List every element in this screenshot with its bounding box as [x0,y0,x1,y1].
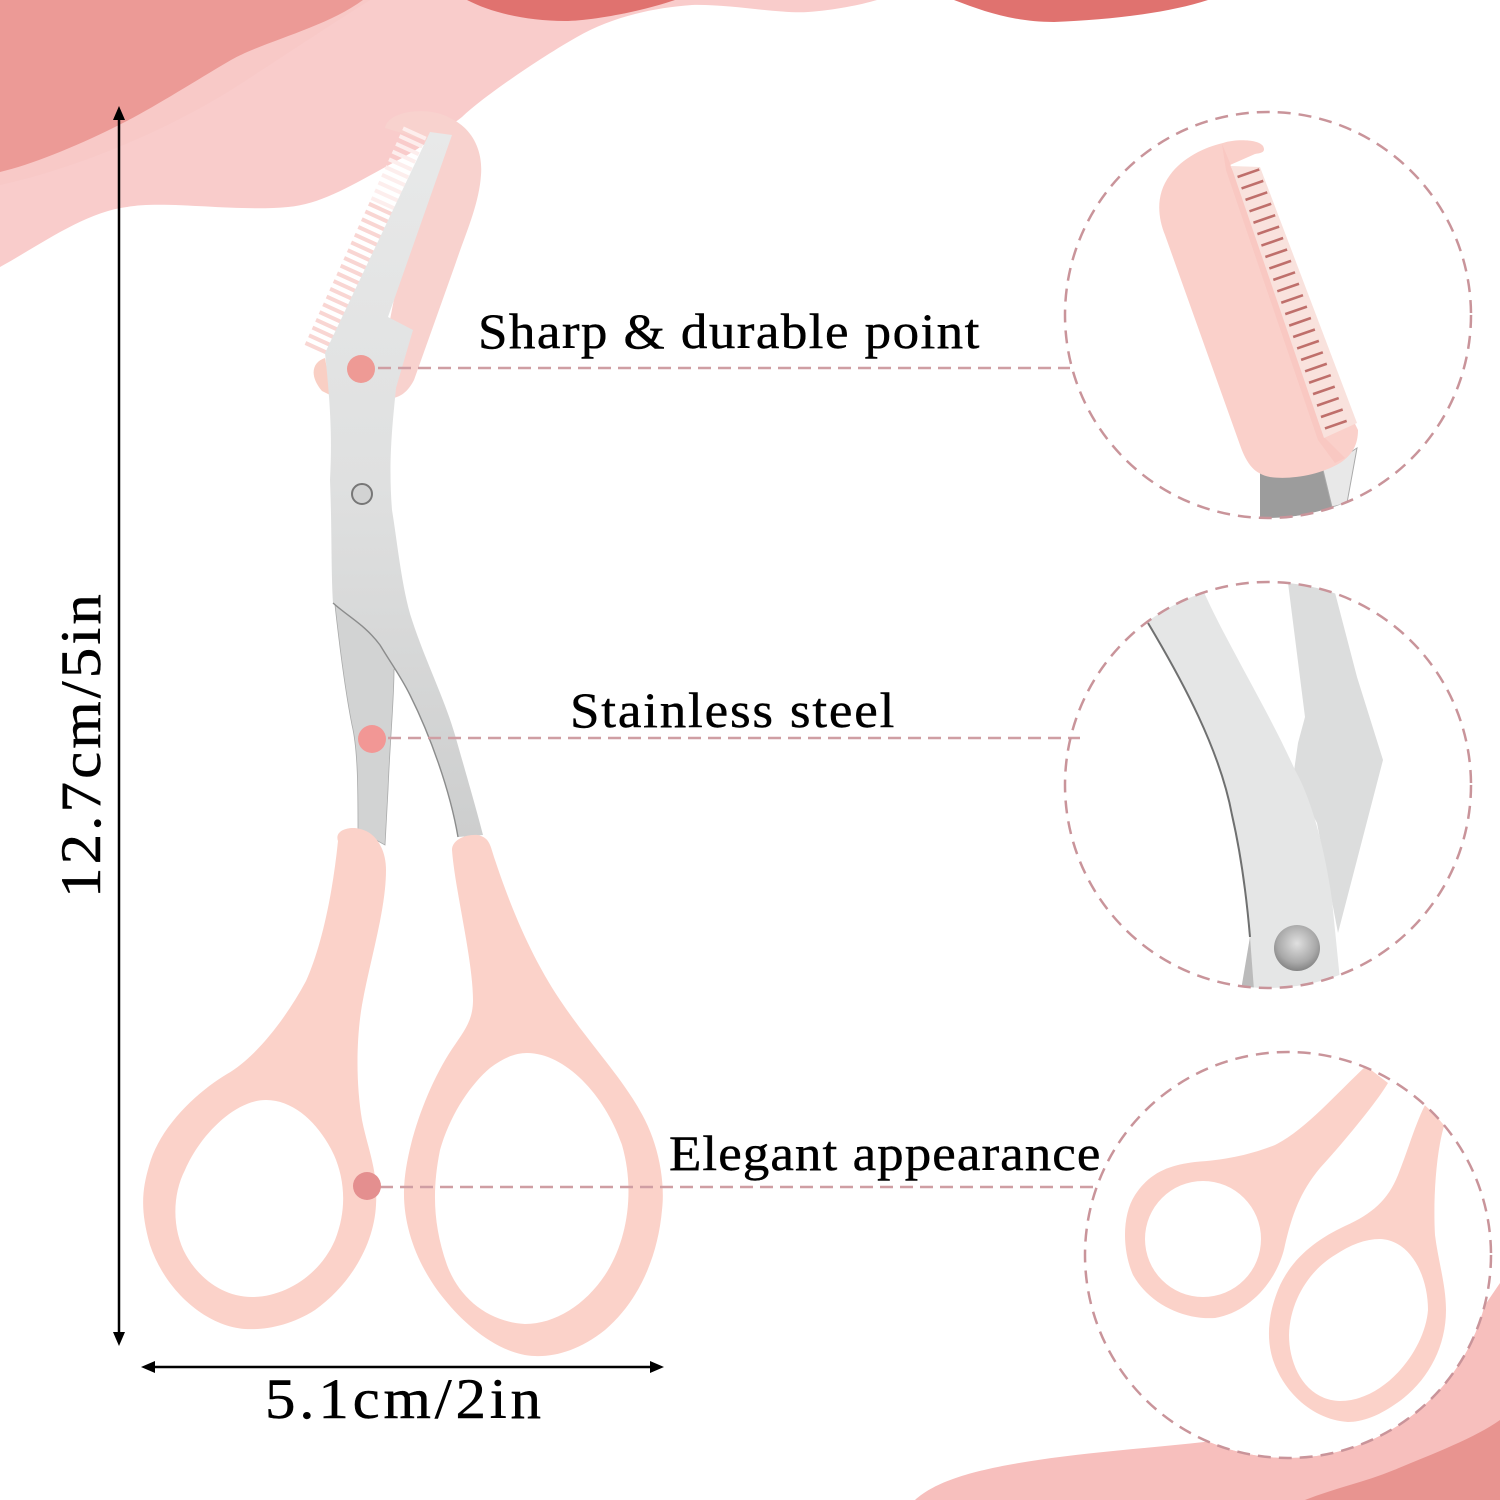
arm edge [1148,623,1250,937]
detail circle: pivot [1147,584,1383,988]
label: elegant appearance: Elegant appearance [669,1126,1100,1182]
lower blade [335,605,400,845]
dimension arrow: width [141,1361,664,1373]
right handle [404,835,663,1356]
steel below comb [1260,470,1332,520]
arm fold sliver [1241,937,1254,990]
background wave: top left [0,0,877,267]
steel highlight [1323,448,1357,507]
comb shaded rim [1230,164,1335,462]
comb teeth lines [1248,172,1338,431]
comb cover [385,111,481,398]
dimension arrow: height [113,106,125,1346]
detail circle: comb [1159,140,1358,518]
upper blade and pivot arm [325,132,483,837]
height label: 12.7cm/5in [49,594,113,898]
callout line: sharp point [378,367,1070,369]
background wave: top right [954,0,1208,22]
pivot screw [352,484,372,504]
cover lower lobe [314,358,332,396]
left handle [143,828,386,1329]
comb bed [1231,166,1357,438]
dashed ring: pivot [1065,582,1471,988]
comb teeth lower [316,205,382,350]
label: stainless steel: Stainless steel [570,683,894,739]
label: sharp and durable point: Sharp & durable point [478,304,980,360]
dashed ring: comb [1065,112,1471,518]
blade shadow edge [333,603,458,837]
handle 1 [1125,1066,1388,1318]
callout line: stainless steel [388,737,1080,739]
dashed ring: handles [1085,1052,1491,1458]
marker dot 3 [353,1172,381,1200]
comb teeth upper [382,130,416,205]
handle 2 [1269,1105,1446,1422]
marker dot 2 [358,725,386,753]
rear blade [1287,575,1383,933]
callout line: elegant appearance [380,1186,1098,1188]
marker dot 1 [347,355,375,383]
comb cover [1159,140,1358,478]
background wave: bottom right [915,1283,1500,1500]
detail circle: handles [1125,1068,1484,1458]
rivet [1274,925,1320,971]
main scissors [143,111,663,1356]
width label: 5.1cm/2in [265,1367,541,1431]
front arm [1140,590,1342,1000]
